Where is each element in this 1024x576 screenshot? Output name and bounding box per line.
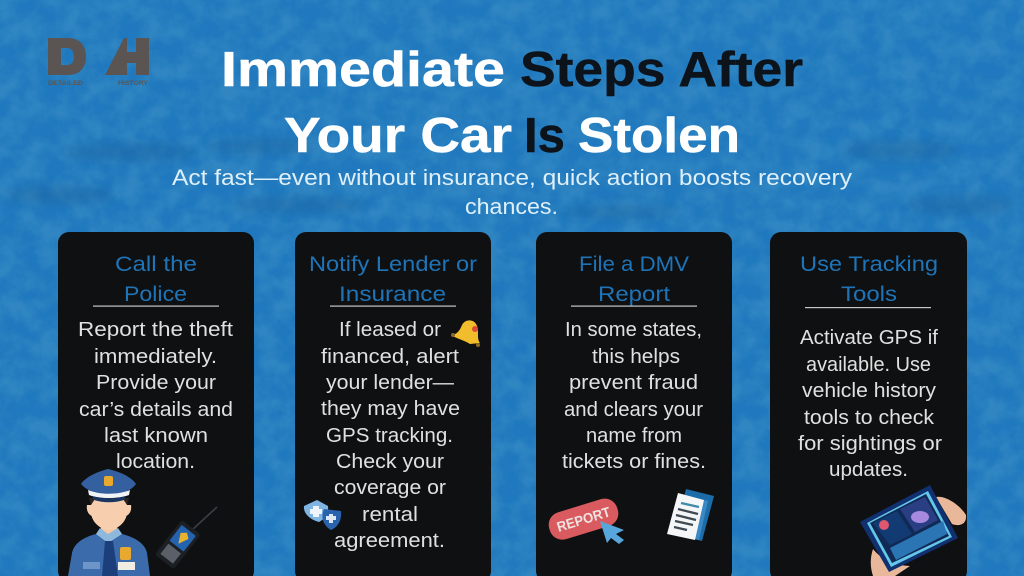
heading: file a dmv report [571, 252, 697, 307]
body text: notify lender or insurance: they may have [321, 398, 460, 420]
body text: notify lender or insurance: If leased or [339, 319, 441, 341]
body text: call the police [78, 319, 233, 473]
body text: notify lender or insurance: rental [362, 504, 418, 526]
body text: notify lender or insurance: Check your [336, 451, 444, 473]
title: Your Car [284, 109, 512, 163]
panel: notify lender or insurance [295, 232, 491, 576]
title: Stolen [578, 109, 740, 163]
heading: notify lender or insurance: Notify Lender or [309, 252, 477, 276]
icon: documents [667, 489, 714, 541]
body text: call the police: Provide your [96, 372, 216, 394]
heading: call the police [93, 252, 219, 307]
title [221, 43, 803, 163]
logo: DVH [48, 38, 149, 87]
heading: use tracking tools [800, 252, 938, 308]
body text: file a dmv report: this helps [592, 346, 680, 368]
icon: alarm bell [451, 320, 480, 347]
icon: report button [545, 495, 624, 544]
logo: DVH: HISTORY [118, 81, 148, 87]
subtitle: chances. [465, 194, 558, 219]
body text: use tracking tools: vehicle history [802, 380, 936, 402]
body text: notify lender or insurance [321, 319, 460, 552]
body text: notify lender or insurance: agreement. [334, 530, 445, 552]
body text: call the police: location. [116, 451, 195, 473]
body text: file a dmv report: and clears your [564, 399, 703, 421]
body text: notify lender or insurance: coverage or [334, 477, 446, 499]
panel: use tracking tools [770, 232, 967, 576]
title: Is [524, 109, 565, 163]
body text: use tracking tools: for sightings or [798, 433, 942, 455]
body text: file a dmv report: In some states, [565, 319, 702, 341]
icon: shields [304, 500, 341, 530]
heading: notify lender or insurance [309, 252, 477, 307]
body text: file a dmv report: tickets or fines. [562, 451, 706, 473]
heading: use tracking tools: Tools [841, 282, 897, 306]
panel: file a dmv report [536, 232, 732, 576]
body text: use tracking tools: Activate GPS if [800, 327, 938, 349]
subtitle: Act fast—even without insurance, quick action boosts recovery [172, 165, 852, 190]
heading: file a dmv report: File a DMV [579, 252, 690, 276]
heading: use tracking tools: Use Tracking [800, 252, 938, 276]
heading: call the police: Call the [115, 252, 197, 276]
body text: call the police: last known [104, 425, 208, 447]
panel: call the police [58, 232, 254, 576]
body text: call the police: Report the theft [78, 319, 233, 341]
icon: police radio [155, 507, 217, 569]
title: Immediate [221, 43, 505, 97]
body text: notify lender or insurance: GPS tracking. [326, 425, 453, 447]
icon: police officer [68, 469, 150, 576]
body text: file a dmv report [562, 319, 706, 473]
body text: call the police: car’s details and [79, 399, 233, 421]
body text: use tracking tools: updates. [829, 459, 908, 481]
heading: call the police: Police [124, 282, 187, 306]
body text: use tracking tools: tools to check [804, 407, 935, 429]
icon: report button: REPORT [555, 503, 613, 535]
logo: DVH: DETAILED [48, 81, 84, 87]
body text: notify lender or insurance: your lender— [326, 372, 454, 394]
body text: use tracking tools [798, 327, 942, 481]
heading: file a dmv report: Report [598, 282, 670, 306]
body text: file a dmv report: name from [586, 425, 682, 447]
title: Steps After [520, 43, 803, 97]
body text: use tracking tools: available. Use [806, 354, 931, 376]
icon: tablet with hands [860, 485, 966, 576]
subtitle [172, 165, 852, 219]
body text: call the police: immediately. [94, 346, 217, 368]
body text: file a dmv report: prevent fraud [569, 372, 698, 394]
body text: notify lender or insurance: financed, alert [321, 346, 459, 368]
heading: notify lender or insurance: Insurance [339, 282, 446, 306]
